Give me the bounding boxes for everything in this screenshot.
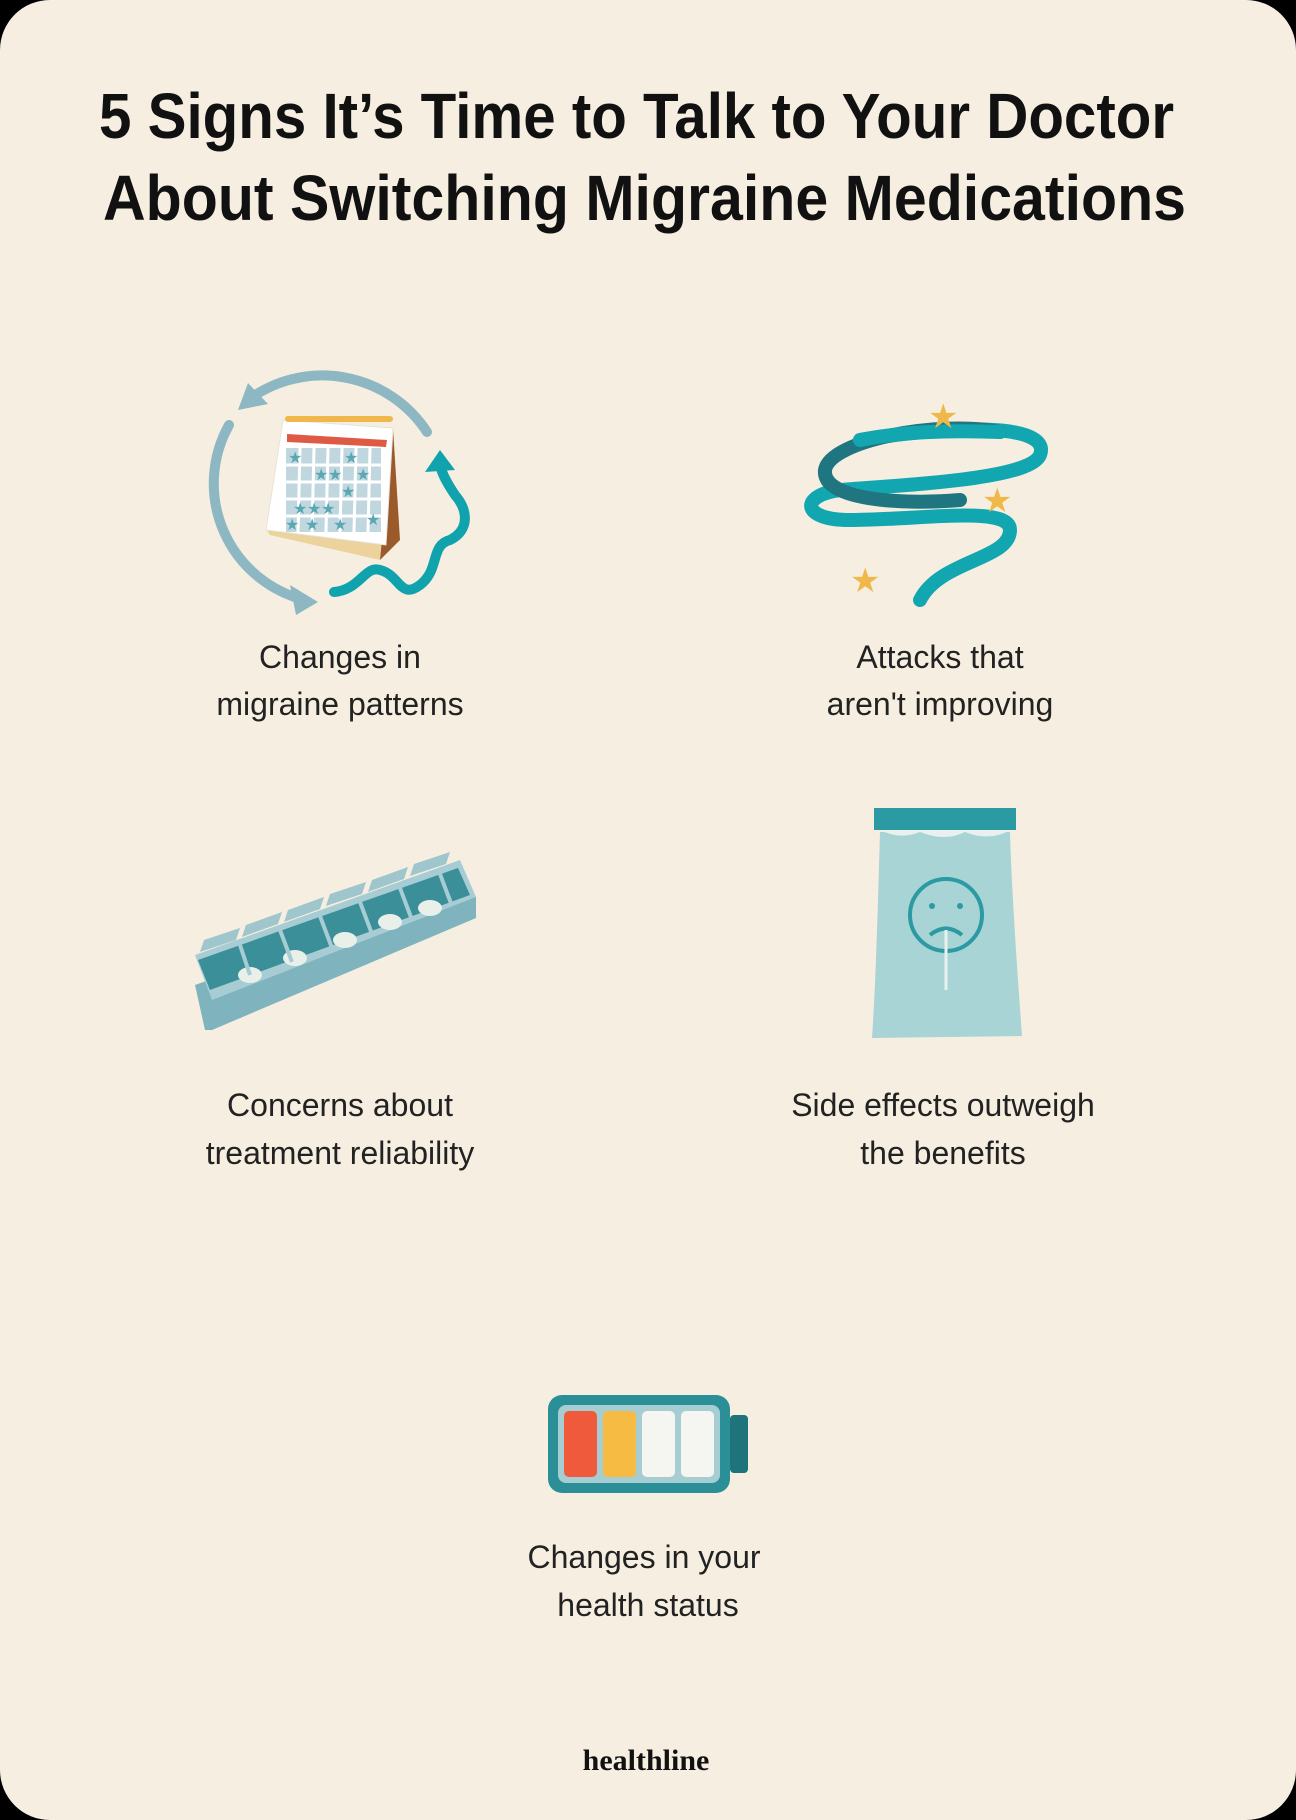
- icon: battery: [548, 1395, 748, 1493]
- icon: calendar with cycle arrows: ★: [341, 484, 355, 501]
- icon: spiral with stars: ★: [982, 482, 1012, 520]
- label: health status: Changes in your: [527, 1539, 761, 1575]
- label: changes in migraine patterns: Changes in: [259, 639, 421, 675]
- icon: calendar with cycle arrows: ★: [356, 467, 370, 484]
- title: [99, 80, 1186, 234]
- icon: calendar with cycle arrows: ★: [305, 517, 319, 534]
- icon: spiral with stars: [811, 398, 1041, 600]
- label: attacks not improving: aren't improving: [827, 686, 1053, 722]
- label: side effects: Side effects outweigh: [791, 1087, 1095, 1123]
- label: health status: [527, 1539, 761, 1623]
- icon: pill organizer: [195, 852, 476, 1030]
- label: attacks not improving: [827, 639, 1053, 722]
- icon: spiral with stars: ★: [928, 398, 958, 436]
- label: changes in migraine patterns: [216, 639, 464, 722]
- title: 5 Signs It’s Time to Talk to Your Doctor: [99, 80, 1174, 152]
- label: treatment reliability: Concerns about: [227, 1087, 453, 1123]
- icon: calendar with cycle arrows: ★: [321, 501, 335, 518]
- icon: calendar with cycle arrows: ★: [307, 501, 321, 518]
- icon: calendar with cycle arrows: ★: [293, 501, 307, 518]
- icon: calendar with cycle arrows: ★: [288, 450, 302, 467]
- icon: calendar with cycle arrows: ★: [328, 467, 342, 484]
- label: attacks not improving: Attacks that: [856, 639, 1024, 675]
- icon: calendar with cycle arrows: [214, 375, 465, 615]
- label: side effects: [791, 1087, 1095, 1171]
- icon: calendar with cycle arrows: ★: [285, 517, 299, 534]
- title: About Switching Migraine Medications: [103, 162, 1186, 234]
- label: treatment reliability: treatment reliability: [206, 1135, 474, 1171]
- icon: spiral with stars: ★: [850, 562, 880, 600]
- label: side effects: the benefits: [860, 1135, 1026, 1171]
- icon: calendar with cycle arrows: ★: [344, 450, 358, 467]
- icon: calendar with cycle arrows: ★: [314, 467, 328, 484]
- icon: calendar with cycle arrows: ★: [333, 517, 347, 534]
- icon: calendar with cycle arrows: ★: [366, 512, 380, 529]
- label: treatment reliability: [206, 1087, 474, 1171]
- label: changes in migraine patterns: migraine patterns: [216, 686, 464, 722]
- label: health status: health status: [557, 1587, 739, 1623]
- logo: healthline: healthline: [583, 1744, 709, 1777]
- icon: bag with sad face: [872, 808, 1022, 1038]
